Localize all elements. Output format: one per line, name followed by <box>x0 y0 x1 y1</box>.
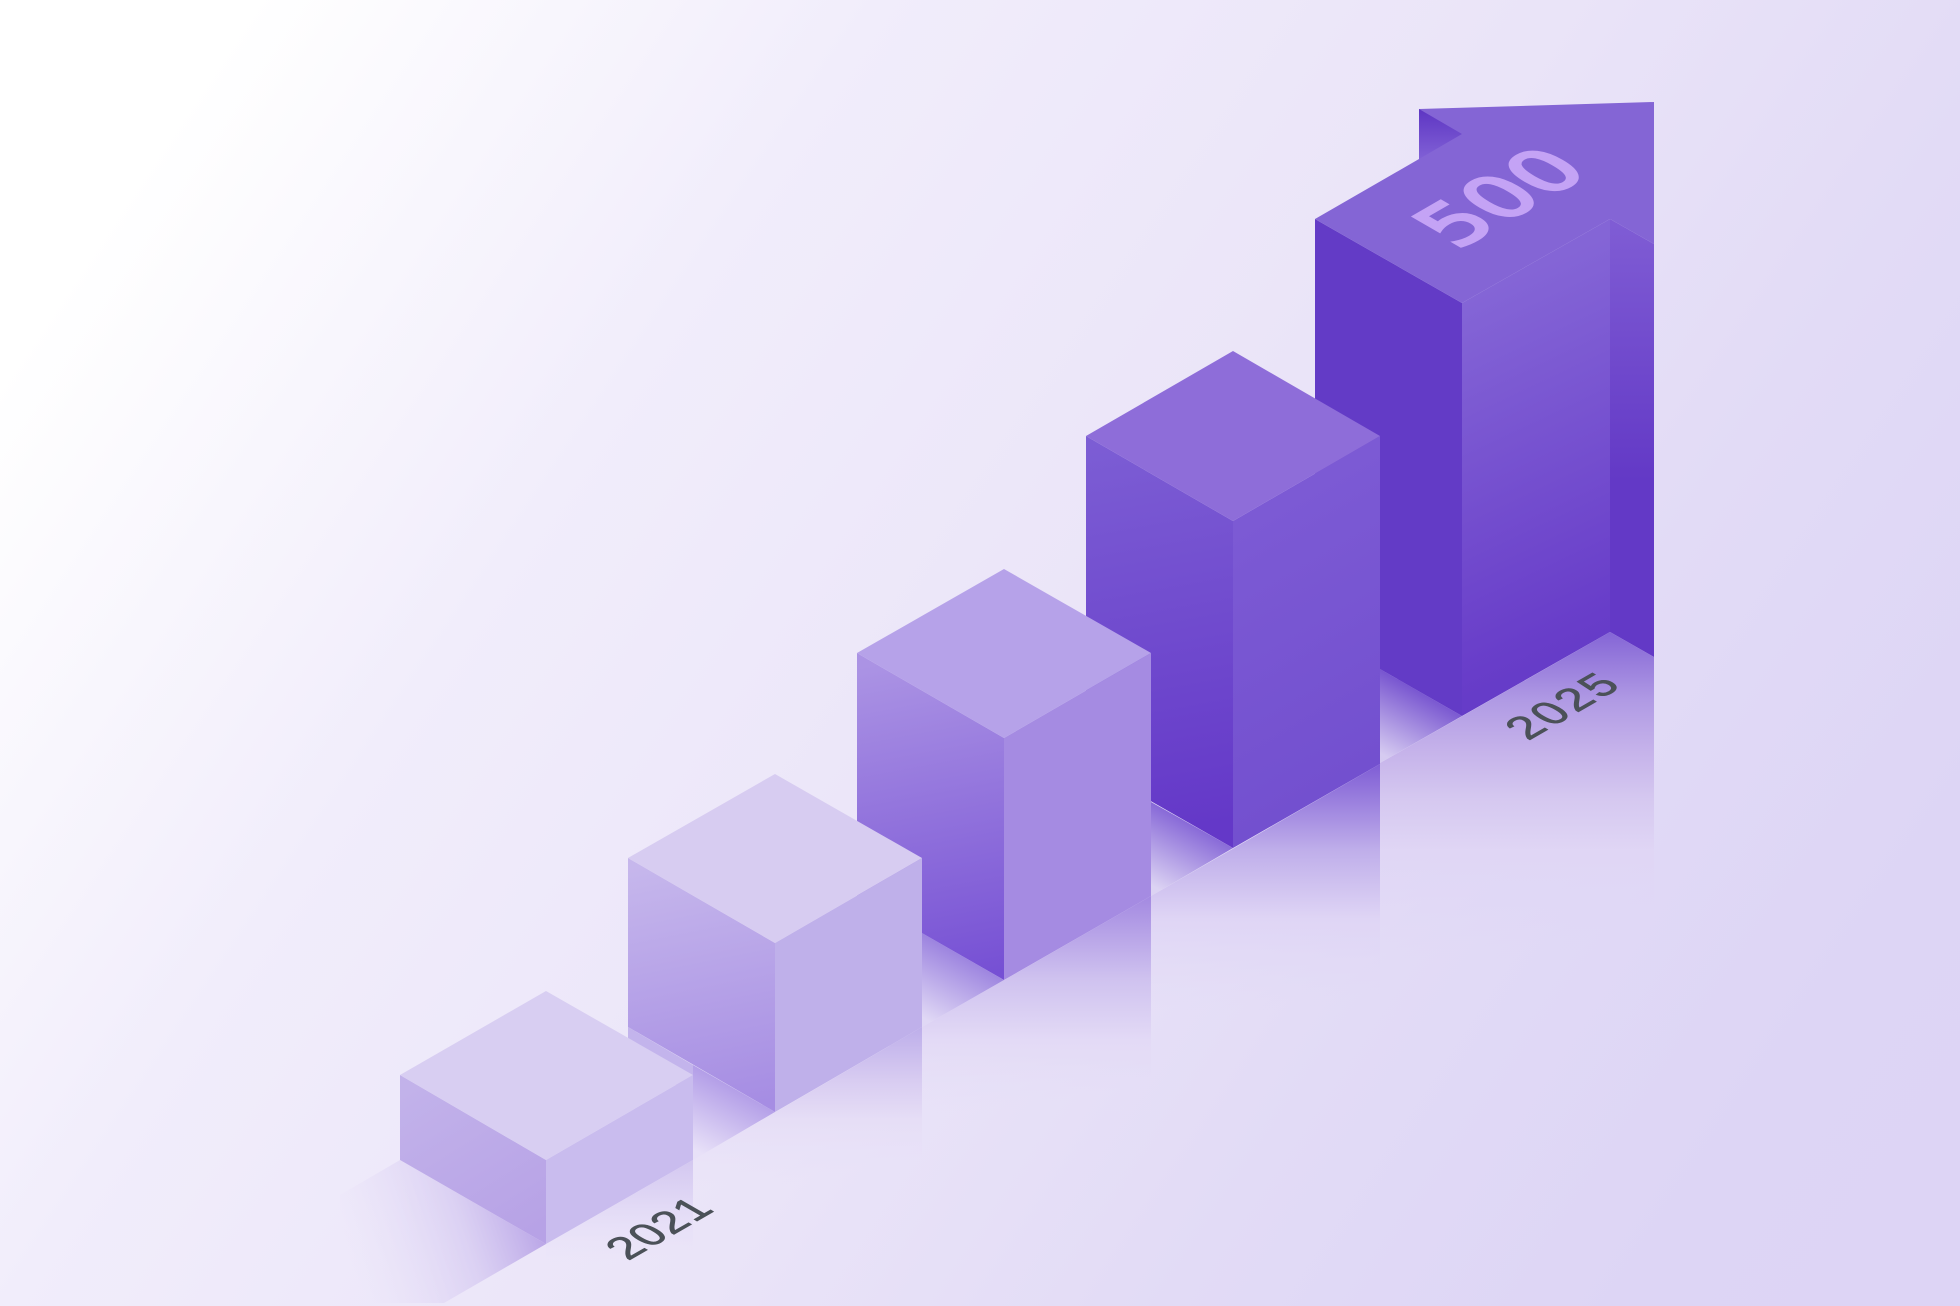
bar 4 <box>1086 351 1380 848</box>
value label 500: 500 <box>1393 135 1608 260</box>
shadow beside bar 3 <box>922 933 1004 1027</box>
reflection under bar 2 <box>693 1027 922 1190</box>
reflection under 2025 bar <box>1380 632 1654 960</box>
bar 2025 with arrow top <box>1315 102 1654 716</box>
bar 2 <box>628 774 922 1112</box>
shadow beside bar 4 <box>1151 802 1233 896</box>
year label 2021: 2021 <box>594 1191 725 1266</box>
shadow beside bar 2 <box>628 1027 775 1160</box>
bar 3 <box>857 569 1151 980</box>
shadow beside 2025 bar <box>1380 669 1462 763</box>
shadow beneath 2021 bar <box>340 1160 546 1303</box>
isometric bar chart <box>340 102 1654 1303</box>
reflection under bar 4 <box>1151 764 1380 1010</box>
bar 2021 <box>400 991 693 1244</box>
year label 2025: 2025 <box>1492 664 1634 746</box>
reflection under 2021 bar <box>546 1160 693 1270</box>
reflection under bar 3 <box>922 896 1151 1115</box>
